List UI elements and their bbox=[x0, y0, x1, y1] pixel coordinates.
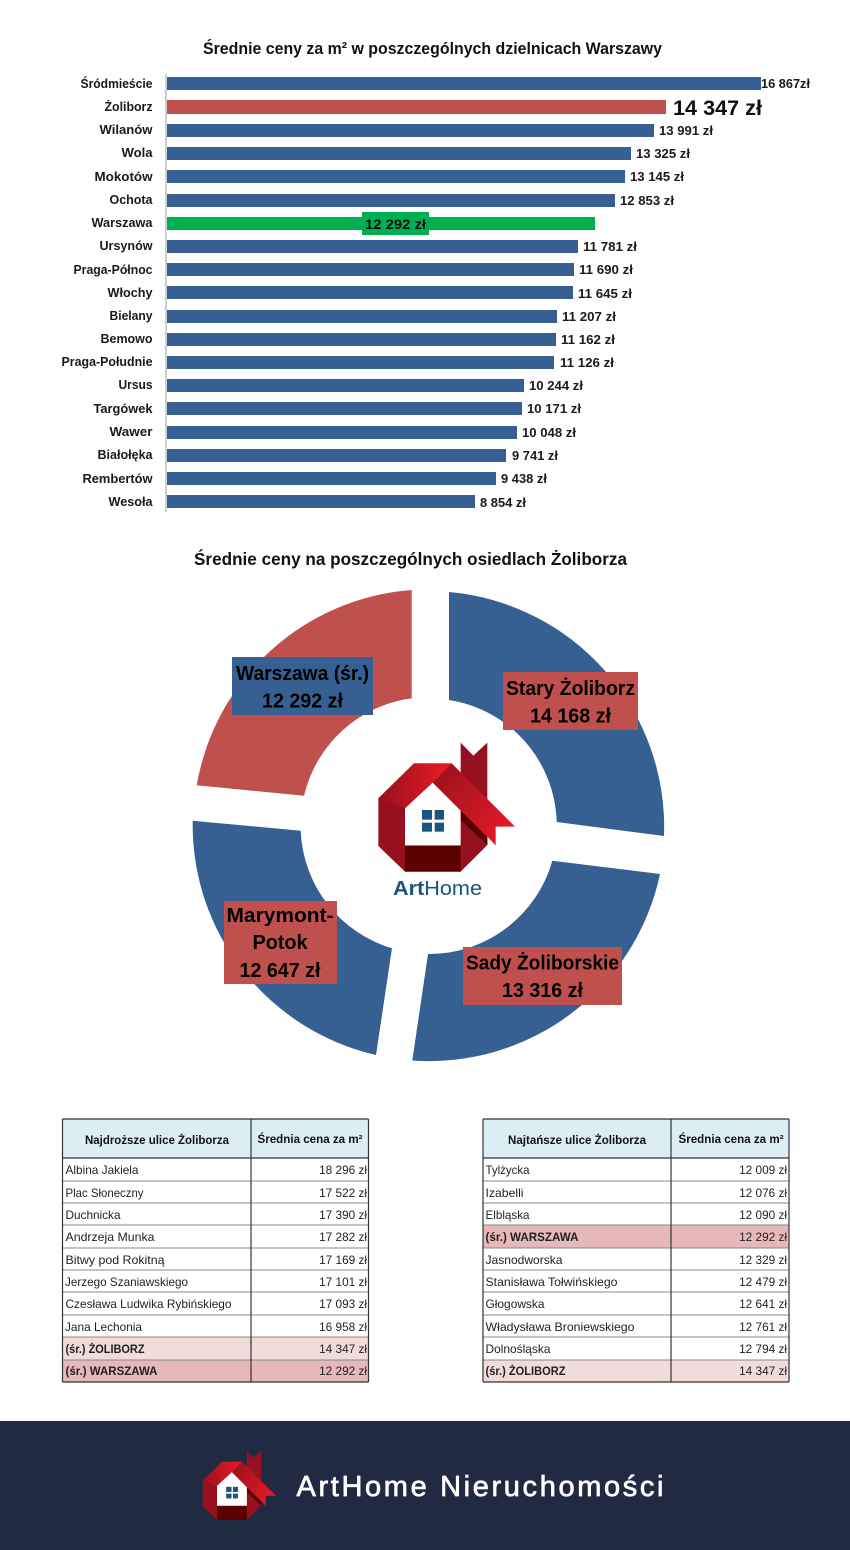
bar: Bemowo bbox=[100, 332, 615, 347]
table: most expensive streets: Plac Słoneczny bbox=[66, 1186, 144, 1200]
table: most expensive streets: 17 522 zł bbox=[319, 1186, 367, 1200]
bar: Włochy: Włochy bbox=[108, 286, 153, 300]
label: Warszawa: Warszawa (śr.) bbox=[236, 663, 369, 685]
table: most expensive streets: Najdroższe ulice Żoliborza bbox=[85, 1134, 230, 1147]
table: cheapest streets bbox=[483, 1119, 789, 1382]
bar: Żoliborz: Żoliborz bbox=[104, 99, 152, 114]
bar: Targówek: 10 171 zł bbox=[527, 401, 581, 416]
bar: Targówek: Targówek bbox=[94, 402, 153, 416]
logo wordmark: ArtHome bbox=[393, 878, 482, 900]
table: most expensive streets: Jana Lechonia bbox=[65, 1320, 142, 1334]
label: Marymont-Potok bbox=[224, 901, 337, 984]
label: Sady Żoliborskie: 13 316 zł bbox=[502, 980, 583, 1002]
table: cheapest streets: 12 329 zł bbox=[739, 1253, 787, 1267]
label: Sady Żoliborskie bbox=[463, 947, 622, 1005]
table: most expensive streets: (śr.) ŻOLIBORZ bbox=[66, 1341, 144, 1356]
title: neighbourhood prices: Średnie ceny na poszczególnych osiedlach Żoliborza bbox=[194, 548, 627, 569]
bar: Śródmieście: 16 867zł bbox=[761, 76, 810, 91]
bar: Praga-Północ: Praga-Północ bbox=[74, 263, 153, 277]
bar: Ochota: Ochota bbox=[110, 193, 154, 207]
table: cheapest streets: 12 794 zł bbox=[739, 1342, 787, 1356]
bar: Wilanów: Wilanów bbox=[100, 123, 153, 137]
bar: Wawer bbox=[110, 425, 576, 440]
icon: footer logo bbox=[203, 1451, 276, 1520]
table: cheapest streets: Tylżycka bbox=[486, 1163, 530, 1177]
bar: Białołęka: Białołęka bbox=[98, 448, 154, 462]
table: cheapest streets: Elbląska bbox=[486, 1208, 530, 1222]
table: cheapest streets: 12 009 zł bbox=[739, 1163, 787, 1177]
table: cheapest streets: (śr.) WARSZAWA bbox=[486, 1230, 579, 1244]
table: cheapest streets: 12 641 zł bbox=[739, 1297, 787, 1311]
bar: Białołęka bbox=[98, 448, 558, 463]
bar: Wawer: Wawer bbox=[110, 425, 153, 439]
bar: Wola: 13 325 zł bbox=[636, 146, 690, 161]
bar: Ochota: 12 853 zł bbox=[620, 193, 674, 208]
segment: Sady Żoliborskie bbox=[412, 861, 660, 1061]
table: most expensive streets: 16 958 zł bbox=[319, 1320, 367, 1334]
table: most expensive streets: 17 169 zł bbox=[319, 1253, 367, 1267]
bar: Rembertów: 9 438 zł bbox=[501, 471, 547, 486]
bar: Warszawa: Warszawa bbox=[92, 216, 154, 230]
bar: Śródmieście: Śródmieście bbox=[80, 76, 153, 91]
title: district prices: Średnie ceny za m² w poszczególnych dzielnicach Warszawy bbox=[203, 39, 663, 58]
bar: Ursus: 10 244 zł bbox=[529, 378, 583, 393]
footer band bbox=[0, 1421, 850, 1550]
table: most expensive streets: Jerzego Szaniawskiego bbox=[65, 1275, 188, 1289]
bar: Bemowo: Bemowo bbox=[100, 332, 153, 346]
bar: Bielany bbox=[110, 309, 616, 324]
icon: ArtHome logo bbox=[378, 743, 515, 872]
label: Stary Żoliborz bbox=[503, 672, 638, 730]
segment: Marymont-Potok bbox=[193, 821, 392, 1055]
table: cheapest streets: Izabelli bbox=[486, 1186, 524, 1200]
table: cheapest streets: 12 076 zł bbox=[739, 1186, 787, 1200]
table: most expensive streets: Bitwy pod Rokitną bbox=[66, 1253, 165, 1267]
bar: Praga-Południe: Praga-Południe bbox=[62, 355, 153, 369]
table: most expensive streets: Duchnicka bbox=[66, 1208, 121, 1222]
table: cheapest streets: Najtańsze ulice Żoliborza bbox=[508, 1134, 647, 1147]
bar: Wola: Wola bbox=[122, 146, 154, 160]
bar: Praga-Północ bbox=[74, 262, 633, 277]
bar: Wesoła: 8 854 zł bbox=[480, 495, 526, 510]
bar: Ursynów bbox=[100, 239, 637, 254]
bar: Ursynów: 11 781 zł bbox=[583, 239, 637, 254]
table: most expensive streets: Czesława Ludwika Rybińskiego bbox=[66, 1297, 232, 1311]
table: cheapest streets: Władysława Broniewskiego bbox=[486, 1320, 635, 1334]
segment: Warszawa average bbox=[197, 590, 412, 796]
bar: Śródmieście bbox=[80, 76, 810, 91]
table: cheapest streets: Dolnośląska bbox=[486, 1342, 551, 1356]
table: most expensive streets: Andrzeja Munka bbox=[66, 1230, 155, 1244]
table: cheapest streets: Głogowska bbox=[486, 1297, 545, 1311]
bar: Bielany: Bielany bbox=[110, 309, 153, 323]
bar: Wola bbox=[122, 146, 690, 161]
bar: Ursynów: Ursynów bbox=[100, 239, 153, 253]
segment: Stary Żoliborz bbox=[449, 592, 664, 836]
table: most expensive streets: (śr.) WARSZAWA bbox=[66, 1364, 158, 1378]
bar: Bemowo: 11 162 zł bbox=[561, 332, 615, 347]
bar: Praga-Północ: 11 690 zł bbox=[579, 262, 633, 277]
table: most expensive streets bbox=[62, 1119, 369, 1382]
label: Warszawa: 12 292 zł bbox=[262, 690, 343, 712]
table: most expensive streets: 17 093 zł bbox=[319, 1297, 367, 1311]
table: most expensive streets: Średnia cena za m² bbox=[258, 1133, 363, 1146]
bar: Mokotów: 13 145 zł bbox=[630, 169, 684, 184]
table: cheapest streets: 12 479 zł bbox=[739, 1275, 787, 1289]
footer brand name: ArtHome Nieruchomości bbox=[296, 1471, 664, 1503]
table: cheapest streets: Stanisława Tołwińskiego bbox=[486, 1275, 618, 1289]
bar: Rembertów bbox=[82, 471, 547, 486]
table: most expensive streets: 14 347 zł bbox=[319, 1342, 367, 1356]
bar: Mokotów: Mokotów bbox=[94, 170, 153, 184]
table: cheapest streets: 12 090 zł bbox=[739, 1208, 787, 1222]
table: most expensive streets: 12 292 zł bbox=[319, 1364, 367, 1378]
table: cheapest streets: 14 347 zł bbox=[739, 1364, 787, 1378]
label: Marymont-Potok: 12 647 zł bbox=[240, 960, 321, 982]
bar: Praga-Południe bbox=[62, 355, 614, 370]
table: cheapest streets: 12 761 zł bbox=[739, 1320, 787, 1334]
bar: Ursus bbox=[118, 378, 583, 393]
bar: Ursus: Ursus bbox=[118, 378, 153, 392]
table: most expensive streets: 17 390 zł bbox=[319, 1208, 367, 1222]
bar chart: district prices bbox=[62, 74, 810, 512]
bar: Wilanów bbox=[100, 123, 713, 138]
donut chart: neighbourhoods bbox=[193, 590, 664, 1061]
table: most expensive streets: 17 282 zł bbox=[319, 1230, 367, 1244]
label: Warszawa bbox=[232, 657, 373, 715]
bar: Żoliborz: 14 347 zł bbox=[673, 97, 762, 120]
table: most expensive streets: 18 296 zł bbox=[319, 1163, 367, 1177]
label: Marymont-Potok: Potok bbox=[252, 932, 308, 954]
table: most expensive streets: 17 101 zł bbox=[319, 1275, 367, 1289]
bar: Ochota bbox=[110, 193, 674, 208]
bar: Praga-Południe: 11 126 zł bbox=[560, 355, 614, 370]
table: cheapest streets: Średnia cena za m² bbox=[678, 1133, 784, 1146]
table: cheapest streets: Jasnodworska bbox=[486, 1253, 563, 1267]
bar: Wesoła: Wesoła bbox=[108, 495, 154, 509]
bar: Wawer: 10 048 zł bbox=[522, 425, 576, 440]
label: Stary Żoliborz: Stary Żoliborz bbox=[506, 677, 635, 700]
bar: Żoliborz bbox=[104, 97, 762, 120]
table: cheapest streets: 12 292 zł bbox=[739, 1230, 787, 1244]
bar: Rembertów: Rembertów bbox=[82, 472, 153, 486]
bar: Warszawa: 12 292 zł bbox=[365, 216, 426, 232]
bar: Włochy bbox=[108, 286, 632, 301]
table: most expensive streets: Albina Jakiela bbox=[66, 1163, 139, 1177]
label: Sady Żoliborskie: Sady Żoliborskie bbox=[466, 952, 619, 974]
bar: Wesoła bbox=[108, 495, 526, 510]
label: Marymont-Potok: Marymont- bbox=[226, 905, 334, 927]
bar: Mokotów bbox=[94, 169, 684, 184]
bar: Wilanów: 13 991 zł bbox=[659, 123, 713, 138]
bar: Włochy: 11 645 zł bbox=[578, 286, 632, 301]
bar: Warszawa bbox=[92, 212, 595, 235]
label: Stary Żoliborz: 14 168 zł bbox=[530, 706, 611, 728]
bar: Bielany: 11 207 zł bbox=[562, 309, 616, 324]
table: cheapest streets: (śr.) ŻOLIBORZ bbox=[486, 1363, 566, 1378]
bar: Białołęka: 9 741 zł bbox=[512, 448, 558, 463]
bar: Targówek bbox=[94, 401, 581, 416]
